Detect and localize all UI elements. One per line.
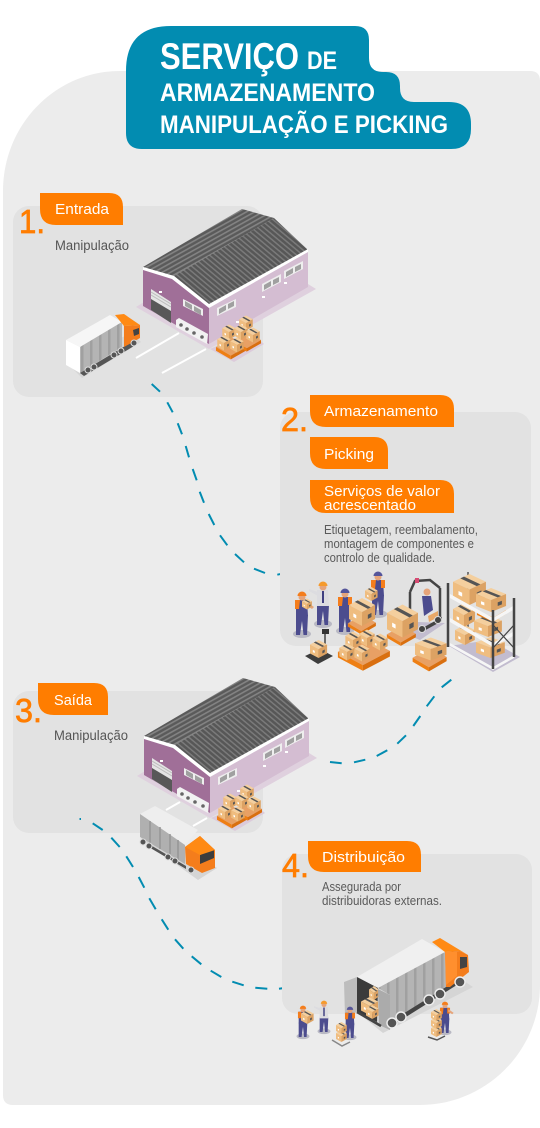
text: description: controlo de qualidade. — [324, 551, 435, 565]
tag: Distribuição — [308, 841, 421, 872]
floor lines — [136, 333, 206, 373]
icon: warehouse with pallets — [137, 678, 317, 831]
text: description: Assegurada por — [322, 880, 401, 894]
step number 1: 1. — [19, 203, 45, 240]
icon: open truck — [344, 938, 473, 1033]
text: description: Etiquetagem, reembalamento, — [324, 523, 478, 537]
tag: Saída: Saída — [54, 692, 93, 709]
tag: Saída — [38, 683, 108, 715]
forklift — [405, 578, 445, 640]
dashed route 3 to 4 — [80, 819, 291, 989]
panel: step 4 distribuicao — [282, 841, 532, 1046]
step number 4: 4. — [282, 847, 309, 884]
dashed route 1 to 2 — [152, 384, 289, 575]
tag: Armazenamento — [310, 395, 454, 427]
panel: step 1 entrada — [13, 193, 316, 397]
title block: MANIPULAÇÃO E PICKING — [160, 109, 448, 139]
tag: Entrada — [40, 193, 123, 225]
title block: ARMAZENAMENTO — [160, 79, 375, 107]
text: Manipulação: Manipulação — [54, 728, 128, 743]
pallet with boxes by workers — [348, 598, 376, 634]
text: Manipulação: Manipulação — [55, 238, 129, 253]
worker group — [293, 572, 387, 638]
text: description: montagem de componentes e — [324, 537, 474, 551]
illustration: workers and warehouse goods — [293, 572, 520, 672]
icon: truck — [140, 806, 217, 880]
floor lines — [166, 802, 207, 826]
tag: Distribuição: Distribuição — [322, 849, 405, 866]
dashed route 2 to 3 — [330, 680, 451, 763]
workers and hand trucks — [297, 1001, 454, 1046]
icon: warehouse with pallets — [136, 209, 316, 362]
tag: Serviços de valor acrescentado — [310, 480, 454, 514]
scale with box — [305, 629, 333, 664]
panel: step 2 armazenamento — [280, 395, 531, 672]
centre pallet — [338, 630, 390, 671]
text: description — [324, 523, 478, 565]
text: description: distribuidoras externas. — [322, 894, 442, 908]
title block — [126, 26, 471, 149]
tag: Entrada: Entrada — [55, 201, 110, 218]
pallet on forklift — [387, 604, 418, 646]
small pallet — [413, 638, 447, 671]
tag: Armazenamento: Armazenamento — [324, 403, 438, 420]
tag: Picking — [310, 437, 388, 469]
title block: DE — [307, 47, 337, 75]
rack — [448, 572, 520, 672]
step number 2: 2. — [281, 401, 308, 438]
tag: Serviços de valor acrescentado: acrescentado — [324, 497, 416, 514]
tag: Picking: Picking — [324, 446, 374, 463]
icon: truck — [66, 314, 141, 378]
title block: SERVIÇO — [160, 36, 299, 77]
step number 3: 3. — [15, 692, 42, 729]
panel: step 3 saida — [13, 678, 317, 880]
text: description — [322, 880, 442, 908]
tag: Serviços de valor acrescentado: Serviços de valor — [324, 483, 440, 500]
